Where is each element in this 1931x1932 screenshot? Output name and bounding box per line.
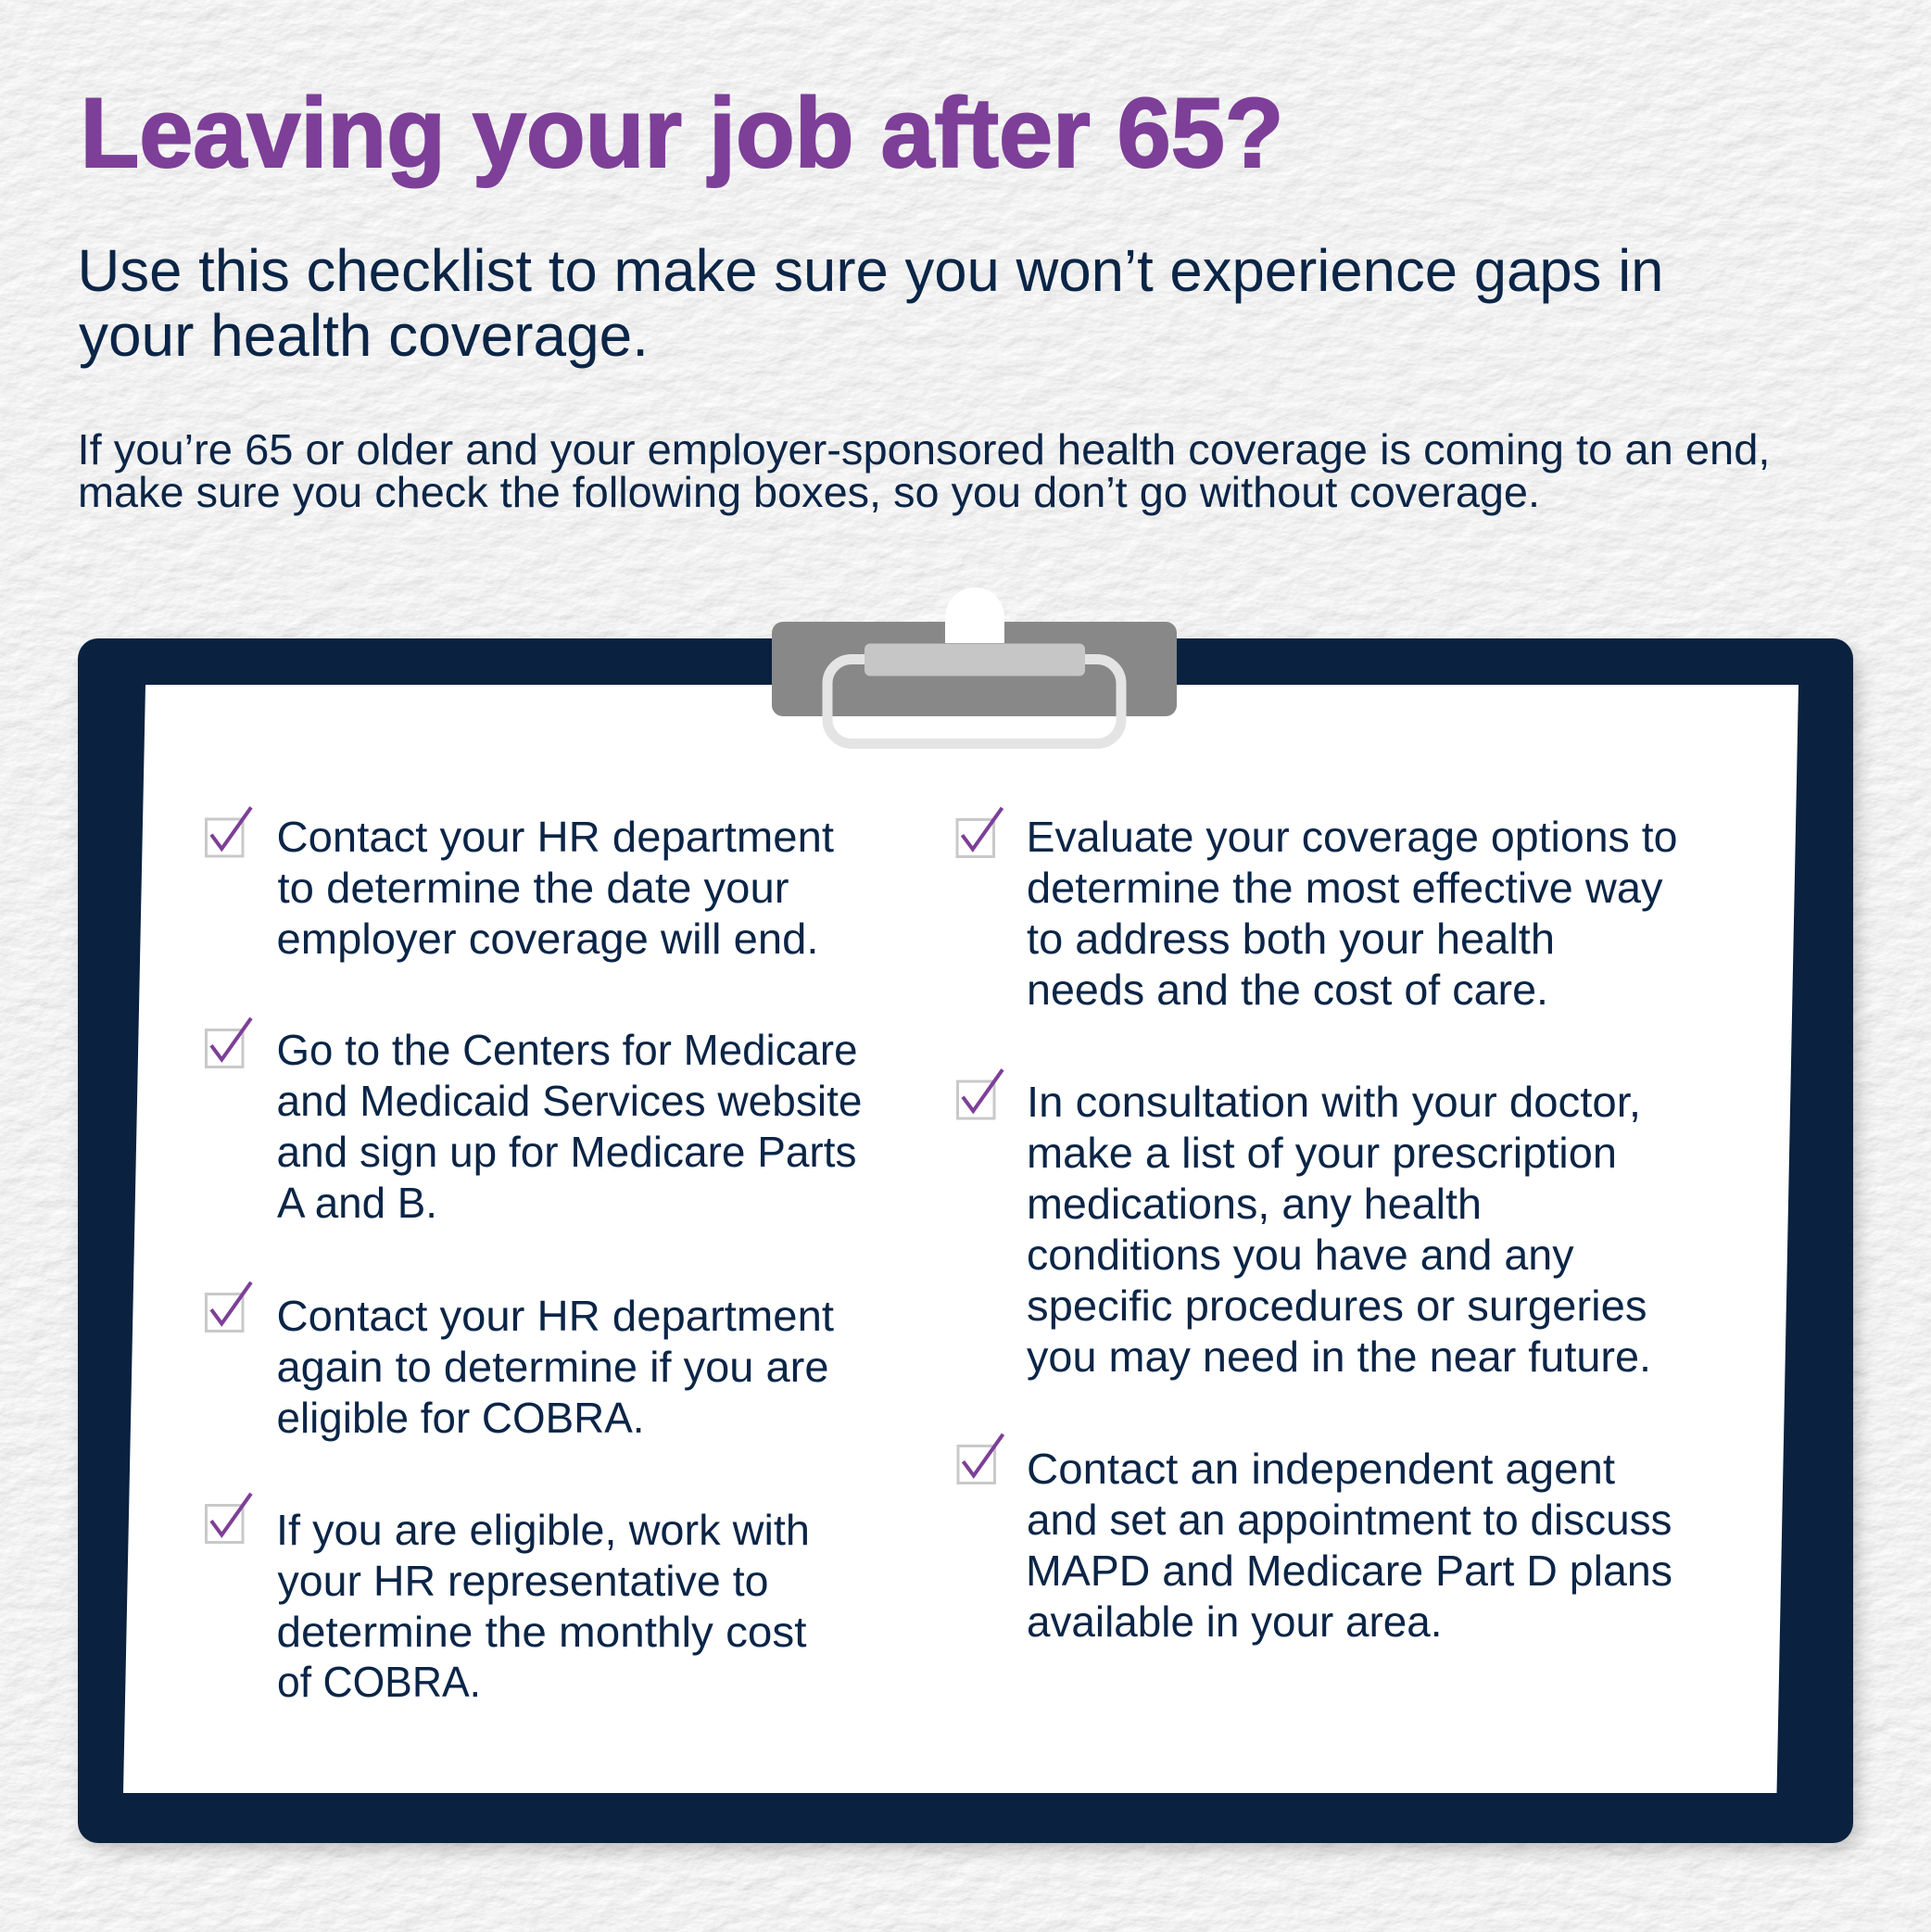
icon: checkbox xyxy=(957,808,1003,856)
intro text xyxy=(78,425,1770,516)
item: COBRA eligibility: eligible for COBRA. xyxy=(276,1394,645,1442)
item: consult doctor: conditions you have and any xyxy=(1027,1231,1573,1279)
item: CMS website: and Medicaid Services website xyxy=(276,1077,862,1125)
icon: checkbox xyxy=(206,1018,251,1067)
item: CMS website: Go to the Centers for Medicare xyxy=(276,1026,858,1074)
item: CMS website: and sign up for Medicare Parts xyxy=(276,1128,856,1176)
item: COBRA cost xyxy=(206,1494,810,1706)
item: COBRA cost: your HR representative to xyxy=(278,1557,769,1605)
panel: clipboard xyxy=(78,587,1859,1850)
subtitle: your health coverage. xyxy=(79,302,649,369)
item: evaluate options: to address both your health xyxy=(1027,915,1555,963)
checklist right column xyxy=(957,808,1677,1646)
item: independent agent: and set an appointment to discuss xyxy=(1027,1496,1672,1544)
intro text: If you’re 65 or older and your employer-sponsored health coverage is coming to an end, xyxy=(78,425,1770,474)
subtitle: Use this checklist to make sure you won’t experience gaps in xyxy=(78,237,1664,304)
item: independent agent: available in your area. xyxy=(1027,1597,1442,1646)
item: CMS website xyxy=(206,1018,862,1227)
item: COBRA eligibility: again to determine if you are xyxy=(276,1343,828,1391)
icon: clip xyxy=(772,587,1177,743)
checklist left column xyxy=(206,807,862,1706)
item: CMS website: A and B. xyxy=(277,1179,437,1227)
item: consult doctor: medications, any health xyxy=(1027,1180,1482,1228)
item: independent agent: Contact an independent agent xyxy=(1027,1445,1615,1493)
item: contact HR date xyxy=(206,807,834,963)
clipboard board xyxy=(78,638,1853,1843)
title: Leaving your job after 65? xyxy=(80,77,1284,188)
paper sheet xyxy=(123,685,1798,1793)
item: evaluate options: Evaluate your coverage options to xyxy=(1027,813,1677,861)
item: contact HR date: employer coverage will end. xyxy=(276,915,819,963)
item: COBRA cost: If you are eligible, work with xyxy=(276,1506,810,1554)
intro text: make sure you check the following boxes, so you don’t go without coverage. xyxy=(78,468,1540,516)
item: evaluate options xyxy=(957,808,1677,1014)
item: contact HR date: Contact your HR department xyxy=(276,813,834,861)
item: evaluate options: needs and the cost of care. xyxy=(1027,966,1548,1014)
item: COBRA cost: of COBRA. xyxy=(277,1658,481,1706)
icon: checkbox xyxy=(958,1069,1003,1118)
clipboard shadow xyxy=(83,648,1859,1850)
item: consult doctor: In consultation with your doctor, xyxy=(1027,1078,1641,1126)
icon: checkbox xyxy=(206,1282,251,1331)
item: independent agent: MAPD and Medicare Part D plans xyxy=(1026,1547,1672,1595)
icon: checkbox xyxy=(206,807,251,856)
icon: checkbox xyxy=(206,1494,251,1542)
icon: checkbox xyxy=(958,1434,1003,1483)
item: consult doctor: you may need in the near future. xyxy=(1027,1332,1651,1381)
item: contact HR date: to determine the date your xyxy=(278,864,789,912)
item: independent agent xyxy=(958,1434,1672,1646)
item: evaluate options: determine the most effective way xyxy=(1027,864,1662,912)
item: COBRA eligibility xyxy=(206,1282,834,1442)
subtitle xyxy=(78,237,1664,369)
item: COBRA cost: determine the monthly cost xyxy=(276,1608,807,1656)
item: COBRA eligibility: Contact your HR department xyxy=(276,1292,834,1340)
item: consult doctor: make a list of your prescription xyxy=(1027,1129,1617,1177)
item: consult doctor xyxy=(958,1069,1651,1381)
item: consult doctor: specific procedures or surgeries xyxy=(1027,1282,1647,1330)
